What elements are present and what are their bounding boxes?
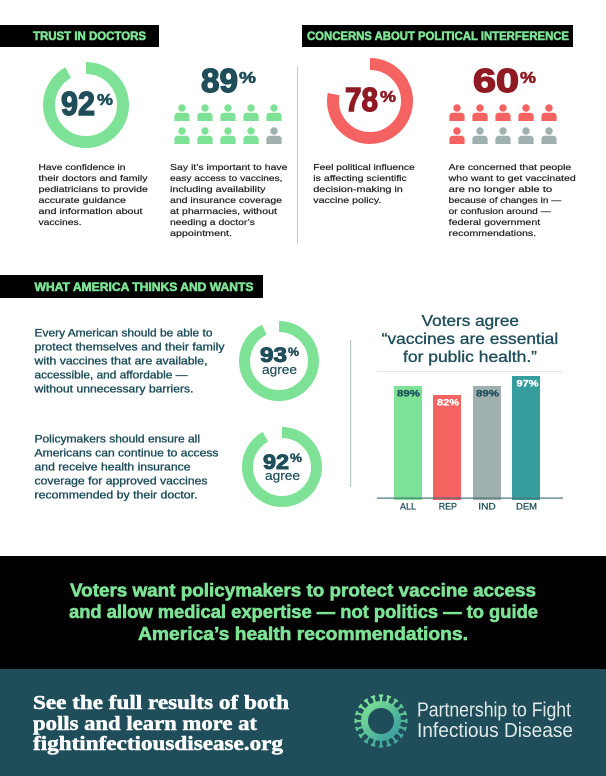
text: every American: protect themselves and their family (34, 342, 225, 354)
text: call to action: Voters want policymakers to protect vaccine access (70, 581, 536, 601)
text: easy access: and insurance coverage (170, 195, 282, 205)
panel: what America thinks and wants (0, 275, 316, 502)
donut chart: 92 percent: 92 (61, 85, 95, 122)
stat: 60 percent (473, 62, 536, 99)
icon: people grid 9 of 10 (174, 104, 282, 144)
axis labels: IND (478, 502, 496, 512)
text: political influence: decision-making in (313, 184, 403, 194)
text: call to action: and allow medical expertise — not politics — to guide (69, 602, 538, 622)
text: easy access: including availability (170, 184, 266, 194)
text: see the full results: fightinfectiousdisease.org (33, 733, 283, 755)
text: confidence in doctors: and information about (38, 206, 143, 216)
text: every American: accessible, and affordable — (34, 370, 188, 382)
panel: trust in doctors (0, 25, 288, 238)
icon: people grid 6 of 10 (449, 104, 557, 144)
text: confidence in doctors: Have confidence in (38, 162, 126, 172)
text: every American (33, 328, 225, 396)
text: policymakers: Americans can continue to access (34, 448, 219, 460)
donut chart: 93 percent agree: 93 (260, 344, 287, 367)
donut chart: 92 percent (49, 68, 123, 142)
stat: 89 percent: 89 (201, 62, 238, 99)
donut chart: 78 percent: % (380, 89, 396, 106)
text: easy access: appointment. (170, 228, 232, 238)
logo wordmark: Infectious Disease (417, 720, 573, 742)
panel: call to action band (0, 556, 606, 669)
chart title (382, 313, 558, 366)
text: political influence: Feel political influence (313, 162, 415, 172)
donut chart: 78 percent: 78 (345, 81, 378, 118)
heading: what America thinks and wants (0, 275, 263, 298)
text: confidence in doctors: vaccines. (38, 217, 82, 227)
text: easy access: needing a doctor’s (170, 217, 255, 227)
donut chart: 93 percent agree: agree (262, 362, 297, 377)
text: policymakers: Policymakers should ensure all (34, 434, 200, 446)
donut chart: 92 percent agree: agree (265, 468, 300, 483)
text: see the full results: See the full results of both (33, 692, 289, 714)
text: access concerns: or confusion around — (449, 206, 551, 216)
donut chart: 93 percent agree: % (288, 345, 299, 359)
axis labels: REP (439, 502, 457, 512)
donut chart: 92 percent agree (248, 432, 316, 502)
text: policymakers: and receive health insurance (34, 462, 190, 474)
bar: all (394, 386, 422, 500)
text: easy access: easy access to vaccines, (170, 173, 282, 183)
logo wordmark: Partnership to Fight (417, 700, 571, 722)
text: call to action: America’s health recommendations. (138, 624, 468, 644)
text: political influence: is affecting scientific (313, 173, 408, 183)
chart title: for public health.” (403, 349, 537, 366)
bar: republican (433, 395, 461, 500)
heading: concerns about political interference (302, 25, 573, 47)
heading: trust in doctors: TRUST IN DOCTORS (33, 29, 146, 43)
stat: 60 percent: % (520, 70, 536, 87)
text: every American: Every American should be able to (34, 328, 212, 340)
text: access concerns: federal government (449, 217, 541, 227)
text: see the full results: polls and learn more at (33, 713, 257, 735)
text: access concerns: are no longer able to (449, 184, 552, 194)
panel: voters agree bar chart (377, 313, 563, 512)
text: political influence (313, 162, 415, 205)
text: confidence in doctors (38, 162, 148, 227)
text: easy access (170, 162, 288, 238)
stat: 89 percent (201, 62, 256, 99)
logo wordmark (417, 700, 573, 742)
text: easy access: Say it’s important to have (170, 162, 288, 172)
bar: independent: 89% (476, 389, 500, 400)
axis labels: ALL (400, 502, 416, 512)
heading: what America thinks and wants: WHAT AMERICA THINKS AND WANTS (34, 280, 253, 294)
text: access concerns: recommendations. (449, 228, 536, 238)
bar: democrat: 97% (516, 379, 539, 390)
panel: concerns about political interference (302, 25, 576, 238)
text: confidence in doctors: their doctors and family (38, 173, 148, 183)
text: confidence in doctors: pediatricians to provide (38, 184, 148, 194)
panel: footer (0, 669, 606, 776)
text: political influence: vaccine policy. (313, 195, 381, 205)
donut chart: 92 percent agree: % (290, 451, 302, 465)
axis labels: DEM (516, 502, 537, 512)
stat: 89 percent: % (239, 70, 256, 87)
donut chart: 93 percent agree (244, 326, 314, 396)
text: call to action (69, 581, 538, 644)
text: see the full results (33, 692, 289, 755)
heading: concerns about political interference: CONCERNS ABOUT POLITICAL INTERFERENCE (307, 29, 569, 43)
donut chart: 78 percent (333, 64, 407, 138)
text: confidence in doctors: accurate guidance (38, 195, 126, 205)
bar: all: 89% (397, 389, 421, 400)
chart title: Voters agree (422, 313, 519, 330)
text: access concerns: Are concerned that people (449, 162, 571, 172)
bar chart (377, 376, 563, 512)
icon: virus logo (356, 696, 406, 746)
text: access concerns: because of changes in — (449, 195, 562, 205)
donut chart: 92 percent: % (97, 92, 113, 109)
text: access concerns: who want to get vaccinated (447, 173, 576, 183)
text: access concerns (447, 162, 576, 238)
text: easy access: at pharmacies, without (170, 206, 278, 216)
text: every American: without unnecessary barriers. (33, 384, 194, 396)
text: every American: with vaccines that are available, (33, 356, 207, 368)
axis labels (400, 502, 537, 512)
chart title: “vaccines are essential (382, 331, 558, 348)
text: policymakers: coverage for approved vaccines (34, 476, 208, 488)
bar: independent (473, 386, 501, 500)
text: policymakers (34, 434, 219, 502)
stat: 60 percent: 60 (473, 62, 519, 99)
bar: democrat (512, 376, 540, 500)
text: policymakers: recommended by their doctor. (34, 490, 198, 502)
heading: trust in doctors (0, 25, 159, 47)
bar: republican: 82% (437, 398, 460, 409)
donut chart: 92 percent agree: 92 (263, 451, 289, 474)
